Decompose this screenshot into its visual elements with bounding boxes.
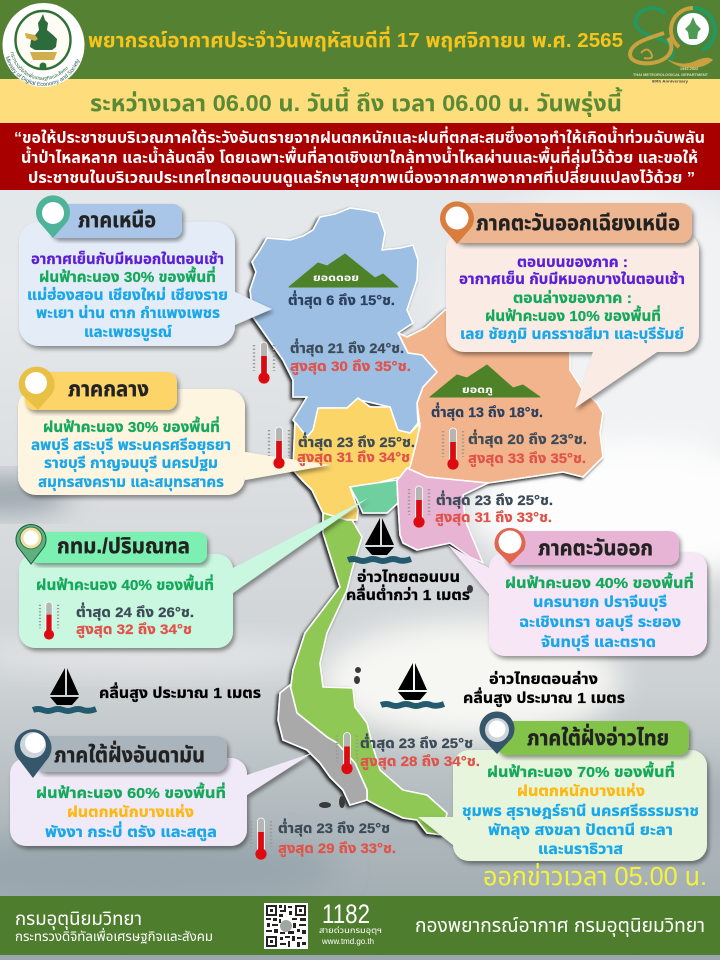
logo: 80th anniversary bbox=[630, 8, 715, 84]
logo: Department emblem: กระทรวงดิจิทัลเพื่อเศรษฐกิจและสังคม bbox=[10, 52, 68, 81]
footer: กองพยากรณ์อากาศ กรมอุตุนิยมวิทยา bbox=[415, 915, 705, 937]
panel: north: และเพชรบูรณ์ bbox=[84, 324, 172, 342]
footer bbox=[0, 896, 720, 955]
panel: southern gulf: พัทลุง สงขลา ปัตตานี ยะลา bbox=[488, 822, 673, 839]
north temperatures: ต่ำสุด 21 ถึง 24°ช. bbox=[290, 338, 404, 357]
panel: north: แม่ฮ่องสอน เชียงใหม่ เชียงราย bbox=[27, 286, 228, 304]
east temperatures: ต่ำสุด 23 ถึง 25°ช. bbox=[436, 490, 553, 509]
header band bbox=[0, 0, 720, 79]
panel: southern gulf: ฝนตกหนักบางแห่ง bbox=[517, 782, 645, 800]
panel: east: ฝนฟ้าคะนอง 40% ของพื้นที่ bbox=[505, 572, 694, 592]
central temperatures: ต่ำสุด 23 ถึง 25°ช. bbox=[298, 432, 415, 451]
panel: northeast: ฝนฟ้าคะนอง 10% ของพื้นที่ bbox=[485, 305, 661, 325]
lower gulf wave info: คลื่นสูง ประมาณ 1 เมตร bbox=[463, 687, 625, 708]
north temperatures bbox=[254, 290, 411, 384]
subtitle: ระหว่างเวลา 06.00 น. วันนี้ ถึง เวลา 06.00 น. วันพรุ่งนี้ bbox=[90, 87, 623, 117]
panel: Bangkok and vicinity: ฝนฟ้าคะนอง 40% ของพื้นที่ bbox=[36, 574, 214, 594]
region: north bbox=[250, 208, 437, 437]
warning band bbox=[0, 123, 720, 190]
south temperatures bbox=[251, 732, 480, 860]
panel: southern Andaman: ฝนฟ้าคะนอง 60% ของพื้นที่ bbox=[36, 782, 226, 802]
upper gulf wave info: คลื่นต่ำกว่า 1 เมตร bbox=[346, 584, 470, 604]
footer: สายด่วนกรมอุตุฯ bbox=[319, 925, 382, 935]
region: northeast bbox=[398, 298, 603, 483]
central temperatures bbox=[269, 427, 415, 469]
Andaman wave info: คลื่นสูง ประมาณ 1 เมตร bbox=[99, 682, 261, 703]
panel: southern gulf bbox=[418, 711, 707, 861]
upper gulf wave info: อ่าวไทยตอนบน bbox=[357, 568, 460, 586]
region: southern gulf bbox=[290, 513, 447, 835]
mountain: Doi peak: ยอดดอย bbox=[313, 273, 359, 284]
lower gulf wave info bbox=[381, 663, 625, 708]
footer: www.tmd.go.th bbox=[321, 937, 374, 946]
mountain: Phu peak bbox=[430, 365, 540, 397]
panel: southern Andaman: ฝนตกหนักบางแห่ง bbox=[67, 803, 194, 821]
footer: 1182 bbox=[322, 899, 370, 929]
panel: north: พะเยา น่าน ตาก กำแพงเพชร bbox=[36, 304, 220, 322]
map of Thailand bbox=[250, 208, 603, 835]
subtitle band bbox=[0, 79, 720, 123]
footer: กระทรวงดิจิทัลเพื่อเศรษฐกิจและสังคม bbox=[15, 927, 213, 944]
east temperatures bbox=[409, 486, 553, 528]
panel: north bbox=[19, 195, 272, 346]
northeast temperatures: สูงสุด 33 ถึง 35°ช. bbox=[468, 450, 586, 468]
panel: east: นครนายก ปราจีนบุรี bbox=[533, 594, 667, 611]
panel: east: ฉะเชิงเทรา ชลบุรี ระยอง bbox=[519, 614, 681, 631]
panel: northeast: ตอนบนของภาค : bbox=[517, 254, 628, 271]
panel: north: ฝนฟ้าคะนอง 30% ของพื้นที่ bbox=[39, 266, 216, 286]
logo: 80th anniversary: 80th Anniversary bbox=[652, 80, 689, 84]
region: east bbox=[397, 468, 488, 563]
region: southern Andaman bbox=[278, 685, 367, 805]
northeast temperatures: ต่ำสุด 20 ถึง 23°ช. bbox=[468, 429, 587, 448]
panel: Bangkok and vicinity: กทม./ปริมณฑล bbox=[57, 535, 190, 558]
south temperatures: สูงสุด 29 ถึง 33°ช. bbox=[278, 840, 396, 858]
panel: northeast: เลย ชัยภูมิ นครราชสีมา และบุรีรัมย์ bbox=[460, 326, 684, 344]
warning band: ประชาชนในบริเวณประเทศไทยตอนบนดูแลรักษาสุขภาพเนื่องจากสภาพอากาศที่เปลี่ยนแปลงไว้ด้วย ” bbox=[28, 166, 695, 188]
central temperatures: สูงสุด 31 ถึง 34°ช bbox=[297, 449, 410, 467]
panel: east: จันทบุรี และตราด bbox=[541, 634, 656, 651]
panel: northeast: ตอนล่างของภาค : bbox=[513, 289, 632, 307]
panel: central bbox=[18, 367, 330, 495]
islands bbox=[319, 585, 473, 808]
panel: central: ฝนฟ้าคะนอง 30% ของพื้นที่ bbox=[43, 416, 220, 436]
panel: central: สมุทรสงคราม และสมุทรสาคร bbox=[38, 474, 224, 491]
panel: southern gulf: ภาคใต้ฝั่งอ่าวไทย bbox=[527, 724, 669, 750]
panel: central: ลพบุรี สระบุรี พระนครศรีอยุธยา bbox=[31, 437, 231, 454]
region: central bbox=[293, 398, 420, 520]
lower gulf wave info: อ่าวไทยตอนล่าง bbox=[489, 670, 598, 688]
south temperatures: ต่ำสุด 23 ถึง 25°ช bbox=[360, 733, 473, 752]
panel: southern Andaman: พังงา กระบี่ ตรัง และสตูล bbox=[45, 821, 217, 842]
north temperatures: ต่ำสุด 6 ถึง 15°ช. bbox=[288, 290, 395, 309]
east temperatures: สูงสุด 31 ถึง 33°ช. bbox=[435, 509, 552, 527]
QR code bbox=[264, 903, 308, 949]
panel: northeast bbox=[440, 201, 699, 408]
north temperatures: สูงสุด 30 ถึง 35°ช. bbox=[290, 358, 411, 376]
issue time: ออกข่าวเวลา 05.00 น. bbox=[483, 861, 707, 891]
panel: southern gulf: และนราธิวาส bbox=[538, 841, 623, 858]
panel: north: ภาคเหนือ bbox=[78, 209, 156, 232]
logo: 80th anniversary: THAI METEOROLOGICAL DEPARTMENT bbox=[633, 73, 709, 77]
northeast temperatures: ต่ำสุด 13 ถึง 18°ช. bbox=[431, 402, 543, 421]
logo: Department emblem: Ministry of Digital Economy and Society bbox=[6, 56, 80, 86]
panel: southern gulf: ฝนฟ้าคะนอง 70% ของพื้นที่ bbox=[487, 761, 675, 781]
panel: southern Andaman: ภาคใต้ฝั่งอันดามัน bbox=[54, 741, 205, 767]
warning band: น้ำป่าไหลหลาก และน้ำล้นตลิ่ง โดยเฉพาะพื้นที่ลาดเชิงเขาใกล้ทางน้ำไหลผ่านและพื้นที่ลุ่มไว้ด้วย และขอให้ bbox=[21, 146, 698, 167]
panel: southern Andaman bbox=[10, 729, 312, 846]
northeast temperatures bbox=[431, 402, 587, 470]
panel: Bangkok and vicinity bbox=[16, 498, 368, 648]
panel: northeast: อากาศเย็น กับมีหมอกบางในตอนเช้า bbox=[459, 270, 685, 288]
logo: Department emblem bbox=[2, 3, 84, 87]
south temperatures: สูงสุด 28 ถึง 34°ช. bbox=[360, 753, 480, 771]
mountain: Doi peak bbox=[289, 254, 398, 287]
panel: Bangkok and vicinity: ต่ำสุด 24 ถึง 26°ช. bbox=[76, 602, 194, 621]
footer: กรมอุตุนิยมวิทยา bbox=[15, 909, 142, 930]
panel: north: อากาศเย็นกับมีหมอกในตอนเช้า bbox=[31, 250, 224, 268]
panel: central: ภาคกลาง bbox=[68, 378, 149, 401]
panel: Bangkok and vicinity: สูงสุด 32 ถึง 34°ช bbox=[76, 621, 192, 639]
south temperatures: ต่ำสุด 23 ถึง 25°ช bbox=[278, 818, 390, 837]
panel: east: ภาคตะวันออก bbox=[538, 537, 653, 560]
panel: southern gulf: ชุมพร สุราษฎร์ธานี นครศรีธรรมราช bbox=[462, 803, 699, 820]
panel: northeast: ภาคตะวันออกเฉียงเหนือ bbox=[476, 212, 680, 235]
upper gulf wave info bbox=[346, 518, 470, 604]
warning band: “ขอให้ประชาชนบริเวณภาคใต้ระวังอันตรายจากฝนตกหนักและฝนที่ตกสะสมซึ่งอาจทำให้เกิดน้ำท่วมฉับพลัน bbox=[14, 126, 705, 147]
mountain: Phu peak: ยอดภู bbox=[462, 385, 493, 396]
title: พยากรณ์อากาศประจำวันพฤหัสบดีที่ 17 พฤศจิกายน พ.ศ. 2565 bbox=[88, 26, 623, 52]
panel: east bbox=[448, 528, 707, 656]
region: Bangkok and vicinity bbox=[350, 480, 398, 513]
logo: 80th anniversary: 1942-2022 bbox=[680, 67, 698, 71]
Andaman wave info bbox=[33, 668, 261, 711]
panel: central: ราชบุรี กาญจนบุรี นครปฐม bbox=[44, 455, 218, 472]
